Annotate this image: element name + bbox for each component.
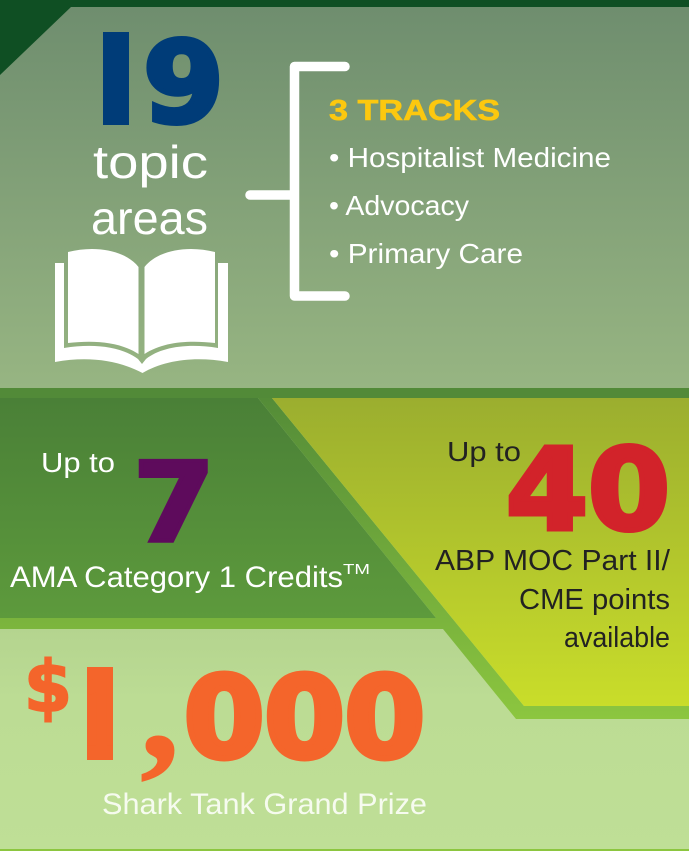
prize amount: , bbox=[140, 625, 180, 791]
prize amount: 000 bbox=[184, 654, 425, 784]
list: tracks: • Primary Care bbox=[329, 238, 523, 269]
text: AMA credits: AMA Category 1 Credits bbox=[10, 561, 343, 594]
list: tracks bbox=[329, 142, 611, 269]
text: up to (credits): Up to bbox=[41, 447, 115, 478]
heading: 19: 9 bbox=[143, 19, 224, 149]
text: points description: ABP MOC Part II/ bbox=[435, 545, 671, 577]
icon: open book bbox=[55, 249, 228, 373]
panel: top background bbox=[0, 0, 689, 388]
heading: 3 tracks: 3 TRACKS bbox=[329, 95, 500, 127]
panel: lower prize background bbox=[0, 618, 689, 851]
number: 40: 40 bbox=[506, 426, 670, 556]
text: AMA credits: TM bbox=[343, 561, 370, 578]
prize amount: 1 bbox=[79, 657, 121, 787]
number: 7: 7 bbox=[133, 439, 215, 567]
prize amount bbox=[28, 656, 422, 782]
text: shark tank grand prize: Shark Tank Grand Prize bbox=[102, 788, 427, 821]
panel: divider bands bbox=[0, 388, 689, 851]
text: points description bbox=[435, 545, 671, 654]
text: topic areas bbox=[91, 136, 208, 244]
list: tracks: • Advocacy bbox=[329, 190, 469, 221]
bracket connector bbox=[250, 66, 345, 296]
text: points description: CME points bbox=[519, 584, 670, 616]
heading: 19 bbox=[103, 32, 220, 126]
text: topic areas: topic bbox=[93, 136, 208, 188]
list: tracks: • Hospitalist Medicine bbox=[329, 142, 611, 173]
text: topic areas: areas bbox=[91, 192, 208, 244]
text: points description: available bbox=[564, 622, 670, 654]
text: up to (points): Up to bbox=[447, 436, 521, 467]
heading: 19: 1 bbox=[95, 22, 137, 152]
panel: credits background bbox=[0, 398, 436, 618]
panel: points background bbox=[272, 398, 689, 706]
prize amount: $ bbox=[24, 646, 72, 728]
